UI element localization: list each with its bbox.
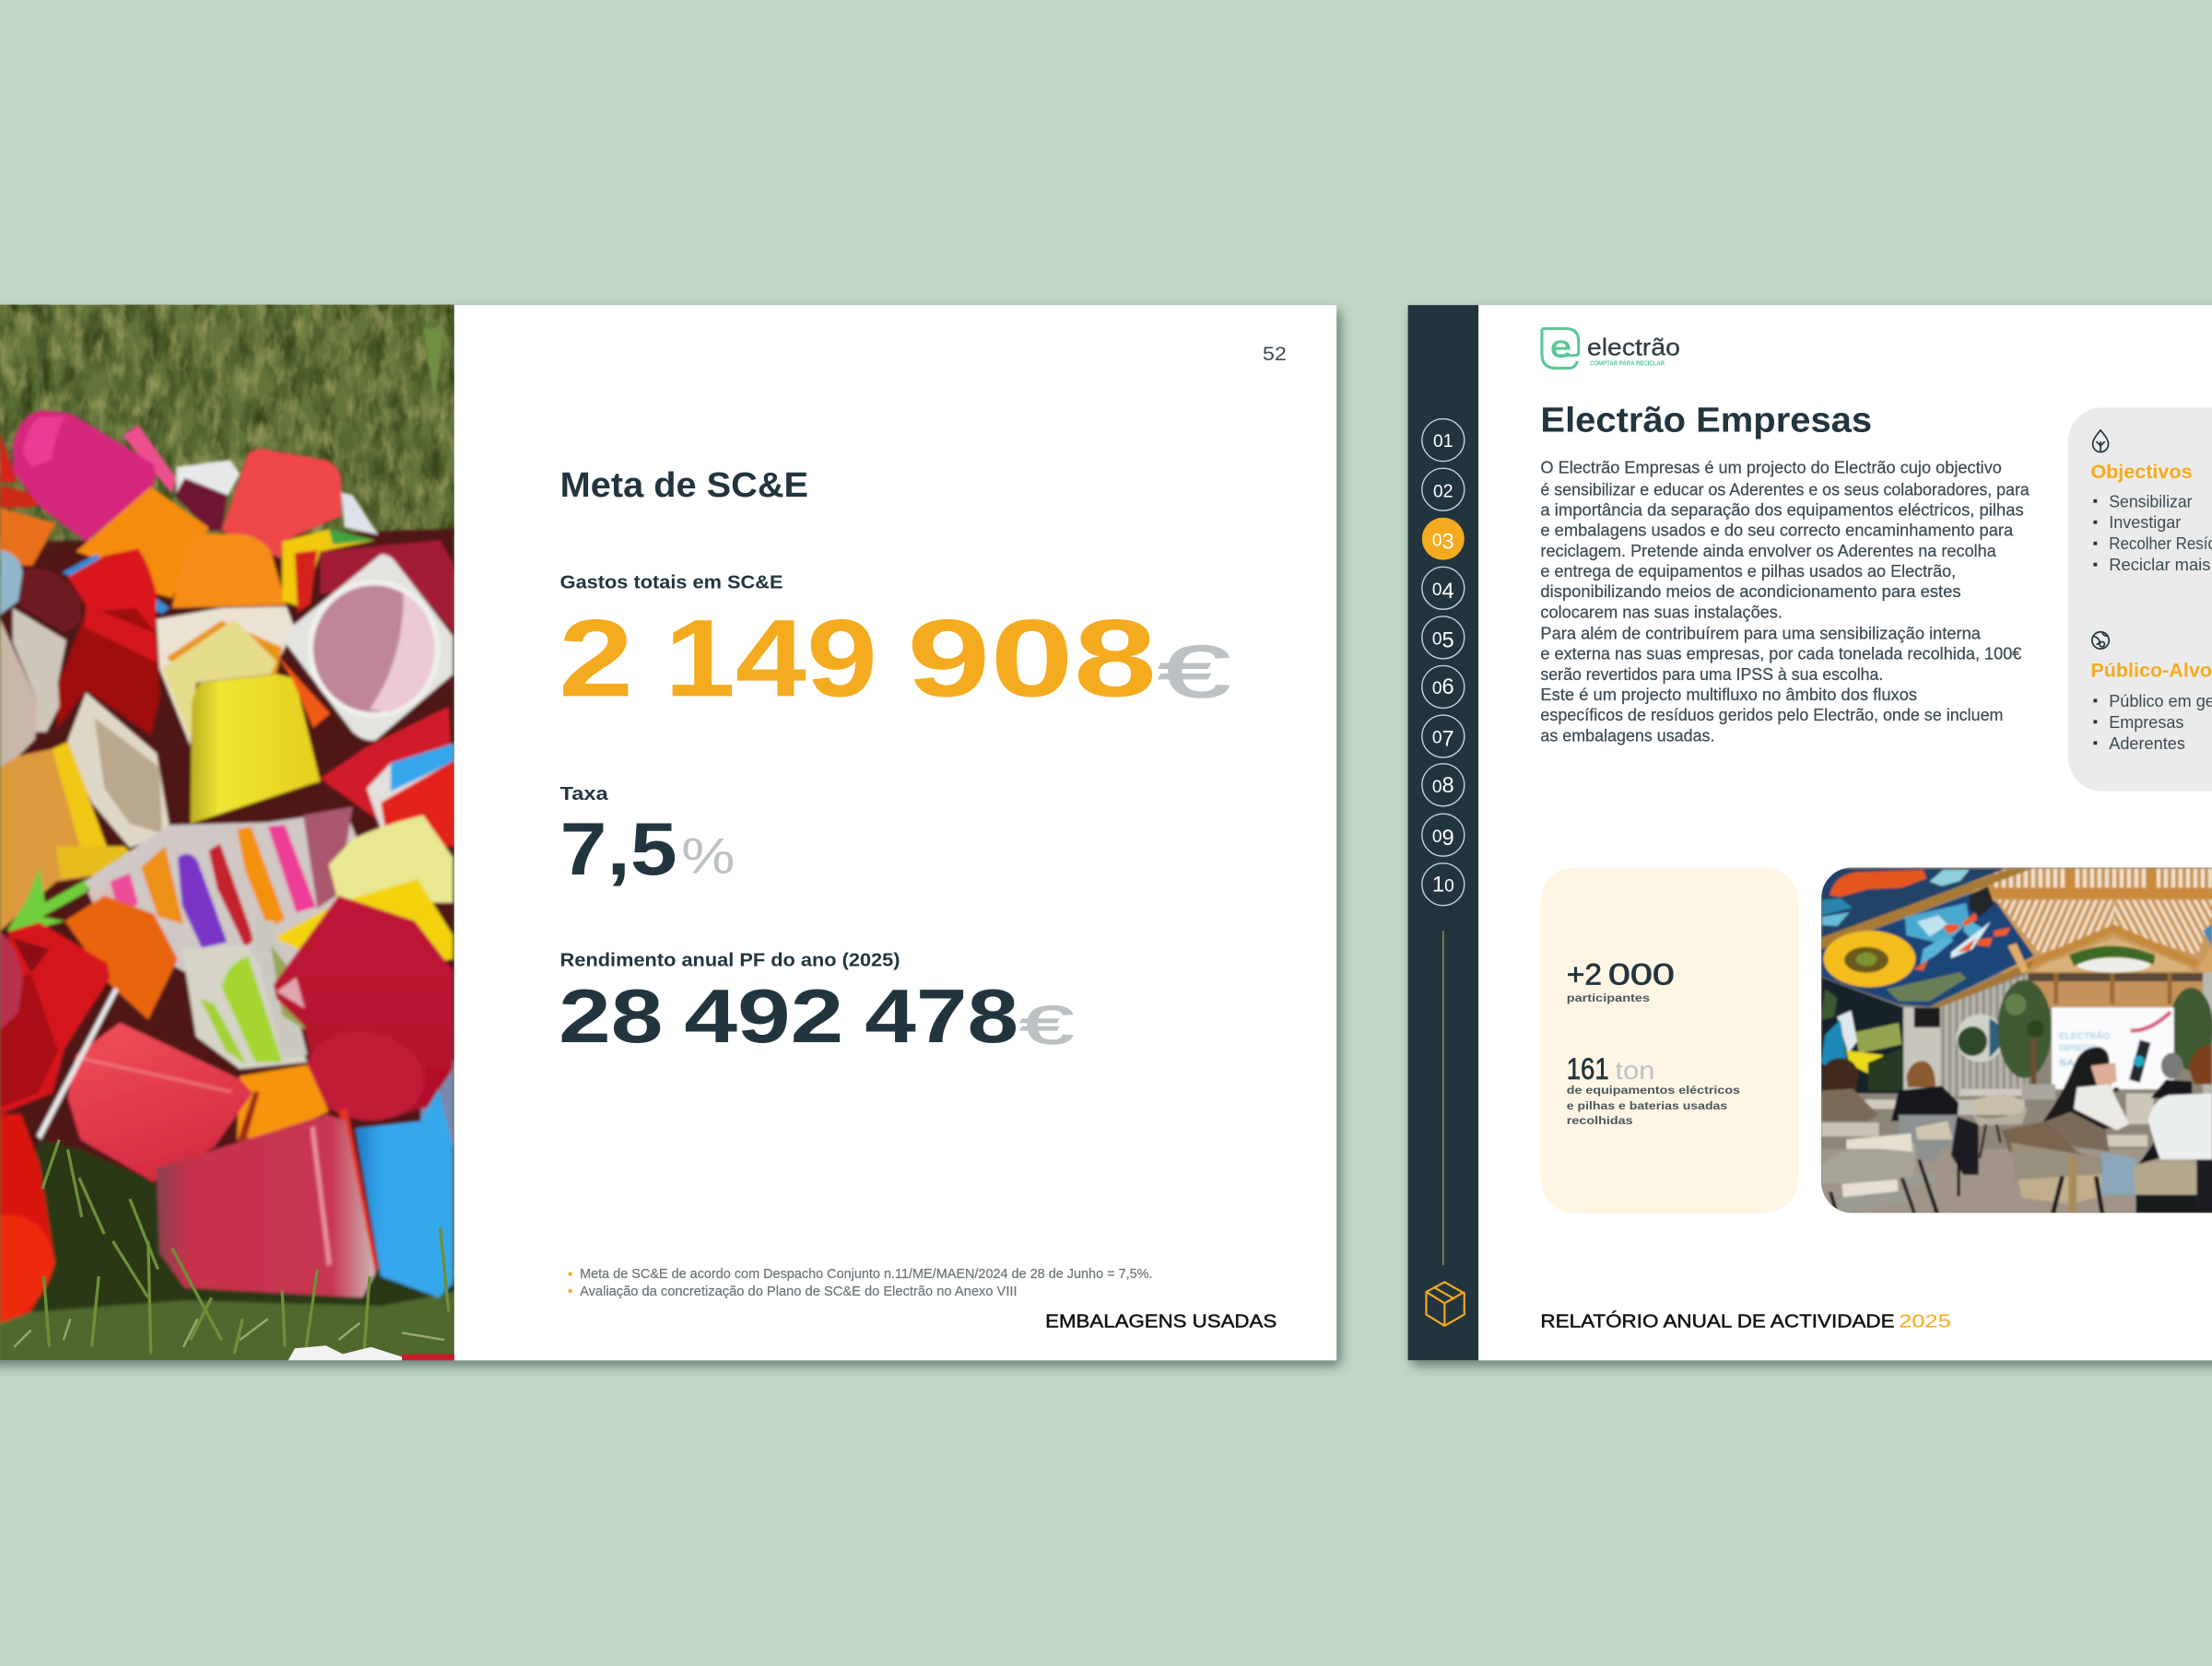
- footnotes: Avaliação da concretização do Plano de SC&E do Electrão no Anexo VIII: [580, 1285, 1018, 1299]
- body text: reciclagem. Pretende ainda envolver os Aderentes na recolha: [1540, 541, 1997, 560]
- list: objectives: [2093, 491, 2212, 574]
- sidebar navigation: 0: [1432, 581, 1442, 600]
- stat: annual income: 478: [865, 973, 1018, 1059]
- pale yellow cup: [329, 815, 453, 903]
- orange cup: [76, 487, 209, 598]
- body text: as embalagens usadas.: [1540, 725, 1714, 745]
- heading: Electrão Empresas: Electrão Empresas: [1540, 400, 1872, 440]
- sidebar navigation: 3: [1442, 530, 1454, 554]
- sidebar navigation: 08: [1432, 774, 1454, 798]
- back wall and mirror: [1938, 974, 2028, 1097]
- stat: annual income: 28: [559, 973, 663, 1059]
- body text: é sensibilizar e educar os Aderentes e os seus colaboradores, para: [1540, 479, 2030, 499]
- stat: total spend: €: [1159, 630, 1230, 712]
- chair legs: [1829, 1124, 2104, 1214]
- woman in foreground: [2043, 1047, 2129, 1152]
- sidebar navigation: 9: [1442, 827, 1454, 851]
- body text: específicos de resíduos geridos pelo Electrão, onde se incluem: [1540, 705, 2003, 724]
- sidebar navigation: 06: [1432, 675, 1454, 699]
- body text: [1540, 458, 2030, 745]
- body text: Este é um projecto multifluxo no âmbito dos fluxos: [1540, 685, 1917, 704]
- left mural: [1821, 978, 1903, 1094]
- logo: electrão: [1542, 329, 1680, 369]
- stat: annual income: Rendimento anual PF do ano (2025): [560, 950, 900, 970]
- icon: package box: [1426, 1282, 1465, 1326]
- logo: electrão: electrão: [1587, 334, 1680, 361]
- photo: event venue with audience: EMPRESAS: [2059, 1044, 2096, 1054]
- top-right dark red with yellow cards: [282, 529, 375, 608]
- stat: total spend: 149: [665, 597, 877, 720]
- logo: electrão: e: [1550, 330, 1571, 364]
- yellow card: [274, 879, 453, 973]
- figure: tonnes collected: 161: [1567, 1052, 1609, 1085]
- icon: globe: [2092, 632, 2109, 649]
- heading: Objectivos: Objectivos: [2090, 461, 2193, 483]
- body text: disponibilizando meios de acondicionamento para estes: [1540, 581, 1961, 601]
- figure: participants: +2: [1567, 957, 1602, 991]
- panel: right page: [1408, 305, 2212, 1360]
- pale dome: [157, 606, 295, 746]
- sidebar navigation: 10: [1432, 873, 1454, 897]
- blue strip and red carton: [62, 555, 170, 614]
- list: audience: [2093, 691, 2212, 753]
- sidebar navigation: 5: [1442, 629, 1454, 653]
- stat: annual income: €: [1020, 996, 1074, 1056]
- coral cup: [221, 449, 341, 558]
- footnotes: [569, 1267, 1153, 1299]
- body text: serão revertidos para uma IPSS à sua escolha.: [1540, 664, 1883, 684]
- orange under tub: [276, 654, 330, 728]
- orange dome: [172, 534, 287, 608]
- painted ceiling mural: [1821, 891, 2034, 1006]
- panel: left page: [0, 305, 1336, 1361]
- sidebar navigation: 02: [1433, 482, 1453, 502]
- jar and dark sphere: [21, 569, 82, 633]
- sidebar navigation: [1408, 305, 1478, 1360]
- footer: report title: 2025: [1899, 1311, 1951, 1332]
- beige tub left and jar: [13, 608, 66, 732]
- bottom white and red scraps: [288, 1345, 402, 1361]
- icon: leaf drop: [2093, 430, 2109, 452]
- dark red cup: [419, 1061, 454, 1145]
- sidebar navigation: 0: [1432, 729, 1442, 748]
- blue tub: [356, 1089, 453, 1297]
- stat: rate: 7,5: [560, 808, 677, 891]
- stat: rate: [560, 783, 735, 891]
- photo: plastic yoghurt cups on grass: [0, 305, 454, 1361]
- wood slat roof: [1972, 869, 2212, 973]
- list: audience: Empresas: [2109, 712, 2183, 732]
- tables and floor: [1821, 1149, 2212, 1214]
- sidebar navigation: 01: [1433, 431, 1453, 452]
- lime tub: [182, 945, 308, 1069]
- row of tubs: [83, 815, 359, 975]
- photo: event venue with audience: [1818, 866, 2212, 1216]
- body text: e externa nas suas empresas, por cada tonelada recolhida, 100€: [1540, 644, 2021, 663]
- top-left red and orange: [0, 431, 17, 482]
- footer: section name: EMBALAGENS USADAS: [1045, 1311, 1277, 1332]
- figure: participants: 000: [1608, 957, 1675, 991]
- stat: total spend: 2: [559, 597, 633, 720]
- bottom grass: [0, 1140, 454, 1361]
- page sheet: [1408, 305, 2212, 1360]
- yellow + beige tub: [53, 734, 107, 848]
- figure: tonnes collected: e pilhas e baterias usadas: [1567, 1099, 1727, 1112]
- sidebar navigation: 0: [1432, 630, 1442, 650]
- photo: event venue with audience: SA: [2059, 1059, 2075, 1069]
- figure: tonnes collected: de equipamentos eléctricos: [1567, 1084, 1740, 1097]
- projection screen: [2052, 1007, 2174, 1089]
- list: objectives: Investigar: [2109, 512, 2181, 532]
- chairs and bags: [1822, 1094, 2212, 1214]
- body text: Para além de contribuírem para uma sensibilização interna: [1540, 623, 1982, 642]
- grass blades: [42, 1140, 449, 1354]
- sidebar navigation: 0: [1432, 531, 1442, 550]
- stat: total spend: [559, 571, 1230, 720]
- back structure: [2028, 972, 2203, 1007]
- footnotes: Meta de SC&E de acordo com Despacho Conjunto n.11/ME/MAEN/2024 de 28 de Junho = 7,5%.: [580, 1267, 1153, 1282]
- stat: rate: %: [681, 827, 735, 884]
- sidebar navigation: 0: [1432, 827, 1442, 847]
- figure: tonnes collected: [1567, 1052, 1740, 1127]
- logo: electrão: COMPTAR PARA RECICLAR: [1590, 360, 1665, 367]
- photo: event venue with audience: ELECTRÃO: [2059, 1029, 2110, 1041]
- garland and lamp: [2077, 957, 2150, 972]
- page number: 52: [1263, 343, 1287, 365]
- green mesh: [7, 867, 88, 931]
- list: audience: Aderentes: [2109, 733, 2185, 753]
- body text: e embalagens usados e do seu correcto encaminhamento para: [1540, 521, 2014, 540]
- stat: annual income: 492: [684, 973, 843, 1059]
- panel: key figures: [1540, 867, 1799, 1213]
- sidebar navigation: 7: [1442, 728, 1454, 752]
- stat: total spend: Gastos totais em SC&E: [560, 571, 782, 592]
- trees: [1997, 980, 2052, 1078]
- big dark red: [56, 608, 159, 734]
- figure: tonnes collected: recolhidas: [1567, 1114, 1633, 1127]
- body text: colocarem nas suas instalações.: [1540, 602, 1783, 621]
- body text: O Electrão Empresas é um projecto do Electrão cujo objectivo: [1540, 458, 2002, 477]
- audience: [1822, 1044, 2212, 1164]
- bottom-left red cup: [0, 1114, 55, 1323]
- figure: tonnes collected: ton: [1616, 1056, 1654, 1085]
- coral big cup: [67, 1023, 253, 1182]
- panel: objectives and audience: [2068, 407, 2212, 792]
- heading: Público-Alvo: Público-Alvo: [2090, 660, 2212, 682]
- figure: participants: participantes: [1567, 991, 1650, 1004]
- page sheet: [0, 305, 1336, 1360]
- list: objectives: Sensibilizar: [2109, 491, 2193, 510]
- right red and blue cards: [320, 707, 454, 832]
- yellow cup: [191, 675, 320, 824]
- sidebar navigation: 4: [1442, 580, 1454, 604]
- body text: e entrega de equipamentos e pilhas usados ao Electrão,: [1540, 561, 1956, 581]
- orange and reds left: [65, 896, 178, 1020]
- stat: annual income: [559, 950, 1074, 1059]
- orange cup centre: [237, 1065, 329, 1140]
- figure: participants: [1567, 957, 1675, 1004]
- stat: total spend: 908: [907, 597, 1157, 720]
- pink tag and cup: [123, 425, 176, 494]
- stat: rate: Taxa: [560, 783, 608, 804]
- translucent red cup: [338, 1108, 378, 1276]
- list: objectives: Reciclar mais: [2109, 555, 2210, 574]
- body text: a importância da separação dos equipamentos eléctricos, pilhas: [1540, 499, 2024, 519]
- heading: Meta de SC&E: Meta de SC&E: [560, 465, 808, 505]
- white tub: [284, 555, 453, 741]
- footer: report title: RELATÓRIO ANUAL DE ACTIVIDADE: [1540, 1310, 1895, 1332]
